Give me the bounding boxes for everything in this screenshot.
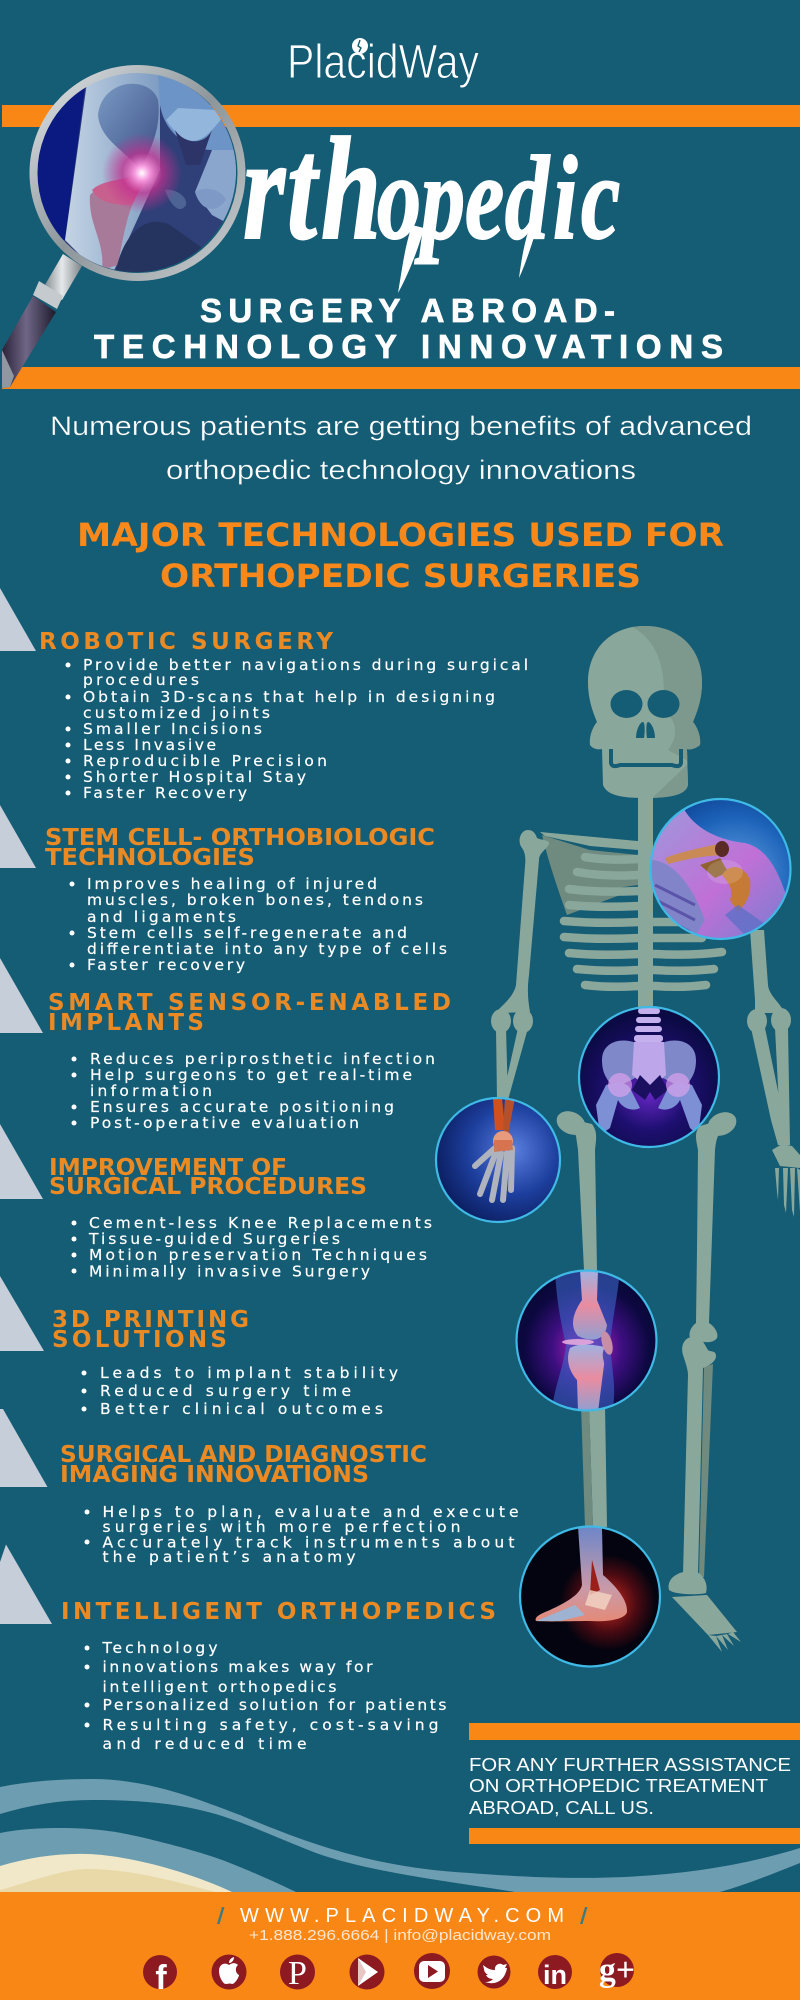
bullet list: muscles, broken bones, tendons xyxy=(87,891,423,909)
title: script word xyxy=(243,107,620,293)
contact line: +1.888.296.6664 | info@placidway.com xyxy=(249,1927,551,1944)
bullet list: Reduces periprosthetic infection xyxy=(90,1050,435,1068)
left arm xyxy=(491,830,549,1100)
heading: ROBOTIC SURGERY xyxy=(39,629,333,655)
bullet list xyxy=(82,1364,398,1418)
bullet list xyxy=(72,1214,432,1280)
heading xyxy=(45,825,435,871)
bullet list: Accurately track instruments about xyxy=(102,1534,515,1552)
bullet list: Post-operative evaluation xyxy=(90,1114,359,1132)
heading: SMART SENSOR-ENABLED xyxy=(48,990,451,1016)
intro text xyxy=(50,411,752,485)
skull xyxy=(588,626,710,800)
bullet list: surgeries with more perfection xyxy=(102,1518,460,1536)
bullet list: and ligaments xyxy=(87,908,236,926)
website: WWW.PLACIDWAY.COM xyxy=(240,1905,564,1927)
bullet list: Technology xyxy=(102,1639,218,1657)
bullet list: and reduced time xyxy=(102,1735,306,1753)
call to action xyxy=(469,1723,800,1844)
bullet list: Motion preservation Techniques xyxy=(89,1246,427,1264)
title: subtitle xyxy=(94,292,723,365)
title: script word: rth xyxy=(243,107,381,270)
bullet list: Less Invasive xyxy=(83,736,216,754)
bullet list: Resulting safety, cost-saving xyxy=(102,1716,438,1734)
text: ABROAD, CALL US. xyxy=(469,1798,654,1818)
spine xyxy=(638,795,653,1020)
triangle marker xyxy=(0,1276,44,1351)
bullet list: Reproducible Precision xyxy=(83,752,327,770)
heading: SURGICAL PROCEDURES xyxy=(49,1174,367,1200)
bullet list: Shorter Hospital Stay xyxy=(83,768,306,786)
triangle marker xyxy=(0,958,43,1033)
bullet list xyxy=(84,1639,446,1753)
orange bar: lower xyxy=(2,367,800,389)
icon: pinterest xyxy=(280,1954,315,1992)
bullet list: procedures xyxy=(83,671,199,689)
icon: twitter xyxy=(478,1956,510,1988)
lens rim xyxy=(34,69,242,277)
bullet list: Stem cells self-regenerate and xyxy=(87,924,407,942)
icon: apple xyxy=(212,1954,246,1990)
bullet list: Obtain 3D-scans that help in designing xyxy=(83,688,495,706)
panel: intelligent orthopedics xyxy=(0,1544,496,1753)
heading: SOLUTIONS xyxy=(52,1327,227,1353)
bullet list: differentiate into any type of cells xyxy=(87,940,447,958)
ribs xyxy=(564,857,722,987)
icon: facebook xyxy=(143,1955,177,1997)
top orange bar xyxy=(469,1723,800,1740)
bullet list: Provide better navigations during surgical xyxy=(83,656,528,674)
bottom orange bar xyxy=(469,1828,800,1844)
main heading: MAJOR TECHNOLOGIES USED FOR xyxy=(77,516,724,554)
panel: 3D printing xyxy=(0,1276,398,1418)
heading xyxy=(52,1307,249,1353)
lens xyxy=(38,73,236,272)
bullet list: Smaller Incisions xyxy=(83,720,262,738)
footer xyxy=(0,1892,800,2000)
bullet list xyxy=(66,656,528,802)
skeleton illustration xyxy=(491,626,800,1652)
heading: IMPROVEMENT OF xyxy=(49,1155,287,1181)
panel: imaging innovations xyxy=(0,1409,519,1566)
bullet list: the patient’s anatomy xyxy=(102,1548,356,1566)
title: script word: opedic xyxy=(377,131,620,264)
panel: robotic surgery xyxy=(0,588,528,802)
bullet list: Help surgeons to get real-time xyxy=(90,1066,412,1084)
right leg xyxy=(669,1108,741,1652)
triangle marker xyxy=(0,805,36,868)
handle xyxy=(2,254,82,388)
icon: linkedin xyxy=(538,1955,572,1990)
icon: youtube xyxy=(414,1953,450,1989)
circle: ankle and foot xyxy=(520,1526,662,1668)
bullet list xyxy=(70,875,447,974)
triangle marker xyxy=(0,588,36,651)
heading: 3D PRINTING xyxy=(52,1307,249,1333)
text: FOR ANY FURTHER ASSISTANCE xyxy=(469,1755,791,1775)
intro text: orthopedic technology innovations xyxy=(166,455,636,485)
bullet list: intelligent orthopedics xyxy=(102,1678,336,1696)
triangle marker xyxy=(0,1409,48,1487)
heading xyxy=(60,1442,427,1488)
clavicle and scapula xyxy=(540,832,638,915)
heading: STEM CELL- ORTHOBIOLOGIC xyxy=(45,825,435,851)
bullet list: Better clinical outcomes xyxy=(100,1400,383,1418)
bullet list: Faster Recovery xyxy=(83,784,247,802)
bullet list xyxy=(84,1503,519,1566)
icon: linkedin: in xyxy=(543,1960,567,1990)
icon: pinterest: P xyxy=(288,1955,307,1992)
bullet list: Faster recovery xyxy=(87,956,245,974)
heading: SURGICAL AND DIAGNOSTIC xyxy=(60,1442,427,1468)
bullet list: innovations makes way for xyxy=(102,1658,373,1676)
bullet list: Improves healing of injured xyxy=(87,875,377,893)
triangle marker xyxy=(0,1124,43,1199)
circle: pelvis xyxy=(578,1006,720,1148)
heading: TECHNOLOGIES xyxy=(45,845,255,871)
icon: magnifying glass with hip joint xyxy=(2,65,245,388)
right arm xyxy=(747,930,800,1217)
title: subtitle: SURGERY ABROAD- xyxy=(200,292,615,329)
bullet list: Minimally invasive Surgery xyxy=(89,1262,370,1280)
bullet list: customized joints xyxy=(83,704,270,722)
icon: play store xyxy=(350,1954,384,1990)
bullet list: Tissue-guided Surgeries xyxy=(88,1230,340,1248)
heading: INTELLIGENT ORTHOPEDICS xyxy=(61,1599,496,1625)
main heading xyxy=(77,516,724,595)
title: subtitle: TECHNOLOGY INNOVATIONS xyxy=(94,328,723,365)
bullet list: Helps to plan, evaluate and execute xyxy=(102,1503,519,1521)
waves xyxy=(0,1779,800,1892)
intro text: Numerous patients are getting benefits of advanced xyxy=(50,411,752,441)
bullet list xyxy=(72,1050,435,1132)
bullet list: Reduced surgery time xyxy=(100,1382,351,1400)
circle: wrist and hand xyxy=(436,1098,560,1222)
main heading: ORTHOPEDIC SURGERIES xyxy=(160,557,641,595)
panel: surgical procedures xyxy=(0,1124,432,1280)
panel: smart sensor xyxy=(0,958,451,1132)
bullet list: information xyxy=(90,1082,212,1100)
panel: stem cell xyxy=(0,805,447,974)
bullet list: Leads to implant stability xyxy=(100,1364,398,1382)
triangle marker xyxy=(0,1544,52,1624)
icon: google plus: g+ xyxy=(599,1952,635,1989)
bullet list: Cement-less Knee Replacements xyxy=(89,1214,432,1232)
left leg xyxy=(553,1107,607,1527)
logo: PlacidWay: PlacidWay xyxy=(287,36,479,89)
text: ON ORTHOPEDIC TREATMENT xyxy=(469,1776,768,1796)
circle: shoulder joint xyxy=(649,798,792,940)
heading: IMAGING INNOVATIONS xyxy=(60,1462,369,1488)
text xyxy=(469,1755,791,1818)
bullet list: Personalized solution for patients xyxy=(102,1696,446,1714)
icon: facebook: f xyxy=(155,1959,167,1997)
heading xyxy=(49,1155,367,1200)
orange bar: top xyxy=(2,105,800,127)
bullet list: Ensures accurate positioning xyxy=(90,1098,394,1116)
heading: IMPLANTS xyxy=(48,1010,204,1036)
heading xyxy=(48,990,451,1036)
circle: knee joint xyxy=(516,1270,658,1412)
